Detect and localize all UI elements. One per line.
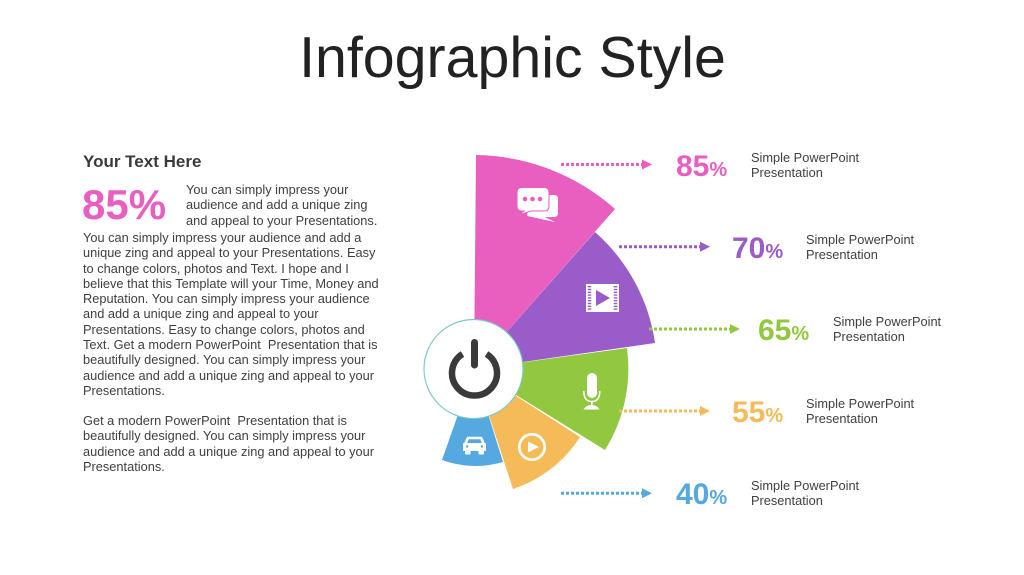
- value: 40%: 40%: [676, 478, 727, 511]
- text block: intro: You can simply impress your: [186, 182, 348, 197]
- text block: body paragraph: [83, 230, 379, 398]
- label: row 5: [751, 478, 859, 508]
- icon: microphone: [584, 373, 600, 410]
- label: row 2: Presentation: [806, 247, 878, 262]
- icon: chat bubbles: [517, 188, 558, 222]
- value: 85%: 85%: [676, 150, 727, 183]
- label: row 2: [806, 232, 914, 262]
- arrow: orange: [619, 406, 710, 416]
- label: row 4: [806, 396, 914, 426]
- label: row 4: Simple PowerPoint: [806, 396, 914, 411]
- label: row 3: Simple PowerPoint: [833, 314, 941, 329]
- text block: body paragraph: beautifully designed. You can simply impress your: [83, 352, 365, 367]
- label: row 3: Presentation: [833, 329, 905, 344]
- text block: body paragraph: unique zing and appeal to your Presentations. Easy: [83, 245, 375, 260]
- text block: intro: [186, 182, 377, 228]
- arrow: pink: [561, 160, 652, 170]
- text block: intro: audience and add a unique zing: [186, 197, 367, 212]
- segment: pink 85%: [474, 155, 615, 369]
- label: row 3: [833, 314, 941, 344]
- text block: body paragraph: Presentations.: [83, 383, 165, 398]
- text block: closing paragraph: Get a modern PowerPoint Presentation that is: [83, 413, 347, 428]
- label: row 1: [751, 150, 859, 180]
- icon: film play: [586, 284, 619, 312]
- text block: body paragraph: audience and add a unique zing and appeal to your: [83, 368, 374, 383]
- label: row 5: Simple PowerPoint: [751, 478, 859, 493]
- text block: body paragraph: Reputation. You can simply impress your audience: [83, 291, 370, 306]
- center circle: [424, 320, 523, 418]
- segment: green 65%: [474, 348, 628, 450]
- text block: body paragraph: You can simply impress your audience and add a: [83, 230, 361, 245]
- label: row 5: Presentation: [751, 493, 823, 508]
- icon: power: [452, 342, 497, 396]
- text block: closing paragraph: Presentations.: [83, 459, 165, 474]
- segment: orange 55%: [474, 369, 580, 489]
- text block: closing paragraph: audience and add a unique zing and appeal to your: [83, 444, 374, 459]
- text block: intro: and appeal to your Presentations.: [186, 213, 377, 228]
- arrow: purple: [619, 242, 710, 252]
- text block: body paragraph: and add a unique zing and appeal to your: [83, 306, 319, 321]
- label: row 4: Presentation: [806, 411, 878, 426]
- text block: body paragraph: Presentations. Easy to change colors, photos and: [83, 322, 365, 337]
- heading: your text here: Your Text Here: [83, 152, 201, 171]
- value: 55%: 55%: [732, 396, 783, 429]
- arrow: green: [649, 324, 740, 334]
- title: Infographic Style: [299, 26, 726, 90]
- value: 70%: 70%: [732, 232, 783, 265]
- label: row 2: Simple PowerPoint: [806, 232, 914, 247]
- text block: closing paragraph: [83, 413, 374, 474]
- segment: purple 70%: [474, 232, 655, 369]
- label: row 1: Simple PowerPoint: [751, 150, 859, 165]
- segment: blue 40%: [442, 369, 503, 466]
- arrow: blue: [561, 488, 652, 498]
- icon: play circle: [519, 434, 545, 460]
- text block: body paragraph: believe that this Template will your Time, Money and: [83, 276, 379, 291]
- text block: body paragraph: Text. Get a modern PowerPoint Presentation that is: [83, 337, 377, 352]
- label: row 1: Presentation: [751, 165, 823, 180]
- text block: body paragraph: to change colors, photos and Text. I hope and I: [83, 261, 349, 276]
- text block: closing paragraph: beautifully designed. You can simply impress your: [83, 428, 365, 443]
- big percentage 85%: 85%: [82, 181, 166, 228]
- value: 65%: 65%: [758, 314, 809, 347]
- icon: car: [463, 437, 486, 454]
